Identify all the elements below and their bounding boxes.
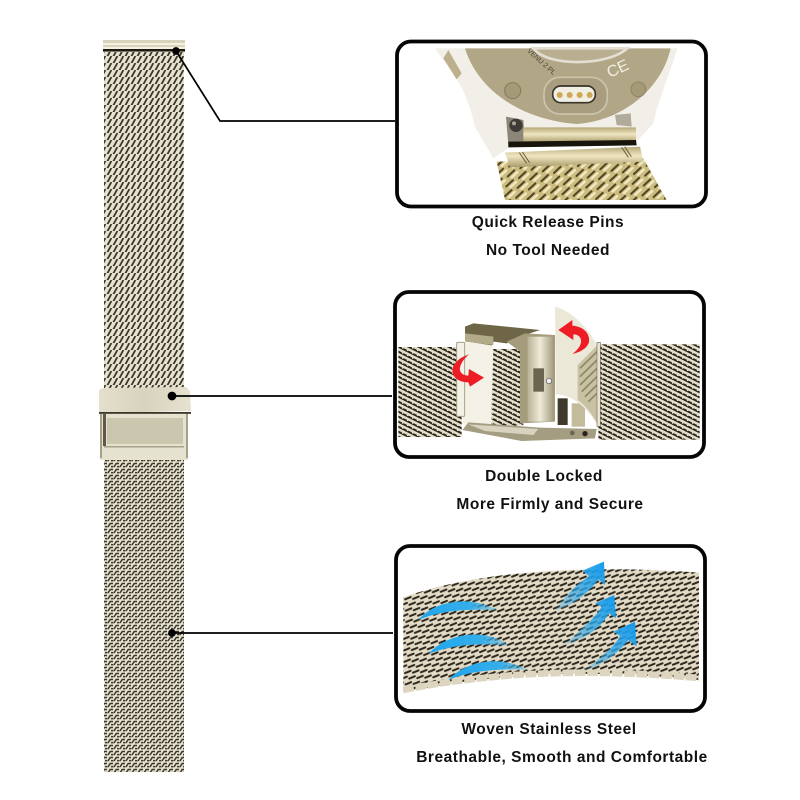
mesh band left <box>398 347 462 437</box>
release pin mechanism <box>505 113 643 167</box>
strap lower mesh <box>104 458 184 772</box>
curved woven mesh <box>403 569 699 693</box>
icon: red arrow right <box>558 320 589 354</box>
caption: quick release pins: No Tool Needed <box>486 242 610 259</box>
caption: quick release pins <box>472 214 624 259</box>
panel: quick release pins <box>435 48 677 200</box>
panel frame: woven stainless steel <box>396 546 705 711</box>
leader line: mesh to panel 3 <box>169 630 393 636</box>
clasp bottom hinge <box>462 422 597 441</box>
sensor ring <box>533 48 627 62</box>
caption: woven stainless steel: Woven Stainless Steel <box>461 721 637 738</box>
side button <box>443 50 462 79</box>
panel frame: quick release pins <box>397 42 706 206</box>
mesh edge links <box>403 673 699 690</box>
clasp centre body <box>507 333 585 427</box>
fold-over clasp <box>99 387 191 460</box>
caption: woven stainless steel <box>416 721 708 766</box>
panel: double locked clasp <box>398 307 700 441</box>
icon: airflow arrows out <box>556 562 637 671</box>
strap top end bar <box>103 40 185 52</box>
engraved text: VENU 2 PL <box>525 48 557 77</box>
watch strap <box>99 40 191 772</box>
leader line: clasp to panel 2 <box>168 392 392 400</box>
screws <box>505 83 521 99</box>
caption: double locked: More Firmly and Secure <box>456 496 644 513</box>
caption: double locked <box>456 468 644 513</box>
panel frame: double locked clasp <box>395 292 704 457</box>
open clasp left leaf <box>457 323 540 427</box>
panel: quick release pins: CE <box>604 57 632 82</box>
panel: woven stainless steel <box>403 562 699 693</box>
mesh band centre <box>492 349 523 426</box>
caption: double locked: Double Locked <box>485 468 603 485</box>
mesh band right <box>598 344 700 440</box>
open clasp right leaf <box>555 307 600 427</box>
photo: watch case <box>435 48 677 158</box>
charging port <box>544 77 607 114</box>
caption: woven stainless steel: Breathable, Smooth and Comfortable <box>416 749 708 766</box>
icon: red arrow left <box>452 354 484 387</box>
watch back plate <box>465 48 671 124</box>
mesh band <box>497 158 667 200</box>
strap upper mesh <box>104 52 184 388</box>
leader line: top end to panel 1 <box>173 48 395 121</box>
caption: quick release pins: Quick Release Pins <box>472 214 624 231</box>
icon: airflow arrows in <box>418 601 528 680</box>
